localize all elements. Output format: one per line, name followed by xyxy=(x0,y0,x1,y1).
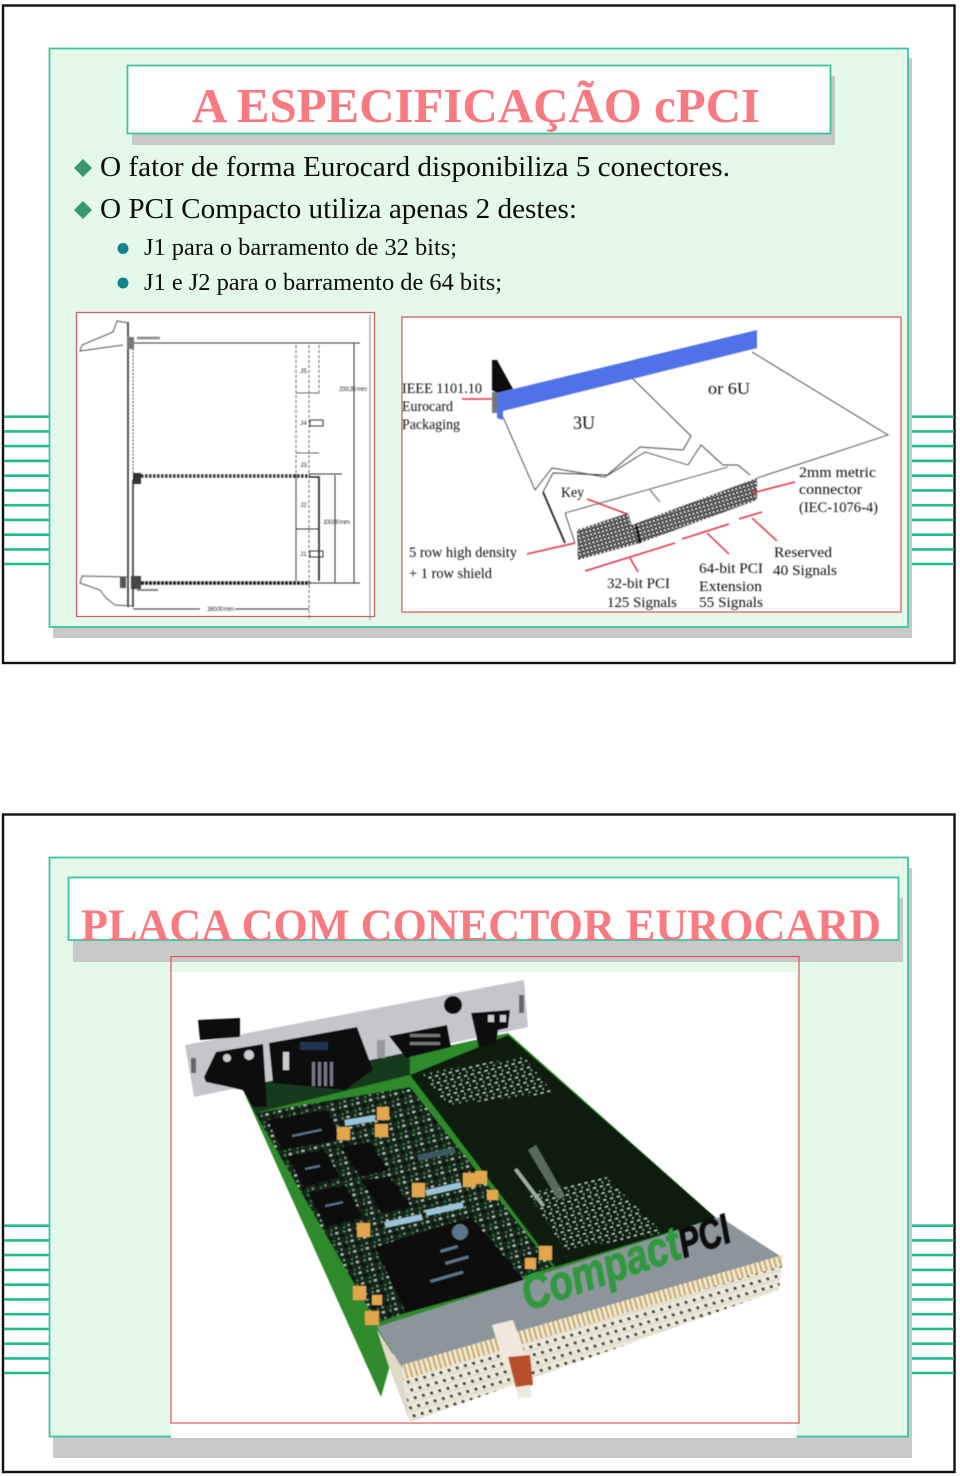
CompactPCI logo: PCI xyxy=(672,1205,737,1267)
circuit board xyxy=(243,1033,716,1397)
blue components xyxy=(345,1118,463,1225)
diagram labels: 64-bit PCI xyxy=(699,561,763,577)
photo of CompactPCI board xyxy=(185,980,783,1422)
board photo figure xyxy=(171,956,799,1438)
blue front panel xyxy=(492,330,757,420)
diagram labels: or 6U xyxy=(708,379,750,398)
diagram labels: 5 row high density xyxy=(409,545,517,561)
slide 2 title box xyxy=(68,878,903,962)
slide 1 title: A ESPECIFICAÇÃO cPCI xyxy=(192,78,760,133)
diagram labels: Packaging xyxy=(402,417,460,433)
connector key xyxy=(492,1320,528,1368)
board outlines xyxy=(503,352,888,543)
chip markings xyxy=(292,1129,469,1283)
sub-bullet icon 2 xyxy=(118,278,128,288)
bullet list xyxy=(74,152,730,296)
drawing labels: 233.35 mm xyxy=(339,386,367,393)
connector diagram figure xyxy=(402,317,901,612)
bullet icon 1 xyxy=(74,159,92,177)
CompactPCI logo: Compact xyxy=(514,1217,689,1321)
drawing labels: J5 xyxy=(300,368,307,375)
bracket connector details xyxy=(191,995,524,1086)
drawing labels: J1 xyxy=(300,551,307,558)
sub-bullet text 2: J1 e J2 para o barramento de 64 bits; xyxy=(144,270,502,296)
diagram labels: 32-bit PCI xyxy=(607,576,670,592)
card connector xyxy=(377,1217,783,1368)
drawing labels xyxy=(207,368,367,613)
photo frame xyxy=(171,956,799,1423)
drawing labels: J4 xyxy=(300,420,307,427)
drawing labels: J2 xyxy=(300,502,307,509)
photo background xyxy=(171,957,799,1438)
diagram labels: 40 Signals xyxy=(773,563,837,579)
diagram labels: 2mm metric xyxy=(799,465,876,481)
bullet icon 2 xyxy=(74,201,92,219)
drawing labels: 100.00 mm xyxy=(323,519,350,526)
drawing linework xyxy=(80,315,370,620)
sub-bullet text 1: J1 para o barramento de 32 bits; xyxy=(144,235,457,261)
bullet text 1: O fator de forma Eurocard disponibiliza 5 conectores. xyxy=(100,152,730,183)
diagram labels: 55 Signals xyxy=(699,595,763,611)
slide frame 2 xyxy=(3,814,954,1472)
diagram labels: connector xyxy=(799,482,862,498)
slide 1 title box xyxy=(128,66,835,145)
diagram labels: Reserved xyxy=(774,545,833,561)
diagram labels: 125 Signals xyxy=(607,595,677,611)
red leader lines xyxy=(462,399,795,572)
diagram labels: + 1 row shield xyxy=(409,566,492,582)
diagram labels: IEEE 1101.10 xyxy=(402,381,482,397)
drawing labels: 160.00 mm xyxy=(207,606,234,613)
orange capacitors xyxy=(337,1107,552,1325)
silkscreen areas xyxy=(422,1057,553,1105)
slide 1 side stripes xyxy=(4,417,954,564)
diagram labels: Eurocard xyxy=(402,399,453,415)
sub-bullet icon 1 xyxy=(118,243,128,254)
diagram labels xyxy=(402,379,878,611)
slide 1 panel xyxy=(50,48,912,638)
drawing labels: J3 xyxy=(300,462,307,469)
slide frame 1 xyxy=(3,6,954,663)
slide 2 panel xyxy=(50,858,912,1458)
diagram labels: Key xyxy=(561,485,584,501)
mechanical drawing figure xyxy=(76,312,374,620)
bullet text 2: O PCI Compacto utiliza apenas 2 destes: xyxy=(100,194,577,225)
slide 2 side stripes xyxy=(4,1226,954,1373)
slide 2 title: PLACA COM CONECTOR EUROCARD xyxy=(81,900,881,950)
chips xyxy=(267,1110,524,1313)
connector block xyxy=(577,478,757,560)
diagram labels: 3U xyxy=(573,413,595,434)
diagram labels: Extension xyxy=(699,579,763,595)
diagram labels: (IEC-1076-4) xyxy=(799,500,878,516)
bracket connectors xyxy=(198,996,510,1107)
front bracket xyxy=(185,980,528,1097)
